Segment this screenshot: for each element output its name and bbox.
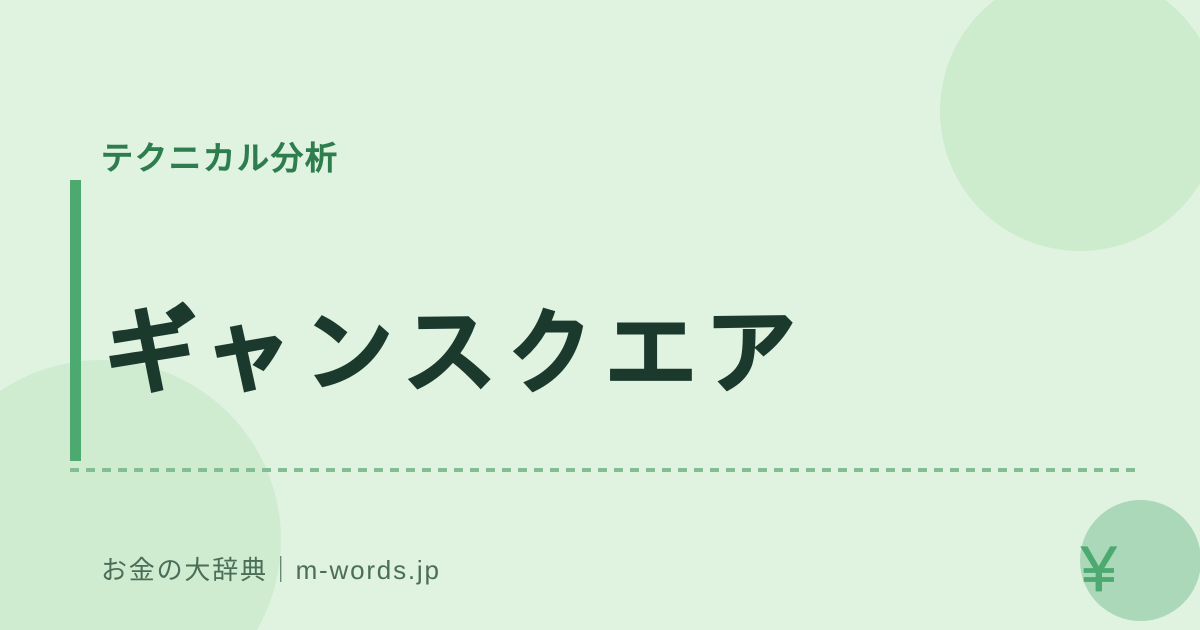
category label: テクニカル分析 [101, 140, 339, 176]
decorative circle: bottom left [0, 360, 281, 630]
dashed divider [70, 468, 1135, 472]
decorative circle: top right [940, 0, 1200, 251]
footer site name: お金の大辞典｜m-words.jp [101, 555, 441, 585]
accent bar [70, 180, 81, 461]
decorative circle: bottom right [1080, 500, 1200, 621]
icon: yen symbol: ¥ [1081, 533, 1117, 605]
main title: ギャンスクエア [101, 300, 804, 407]
